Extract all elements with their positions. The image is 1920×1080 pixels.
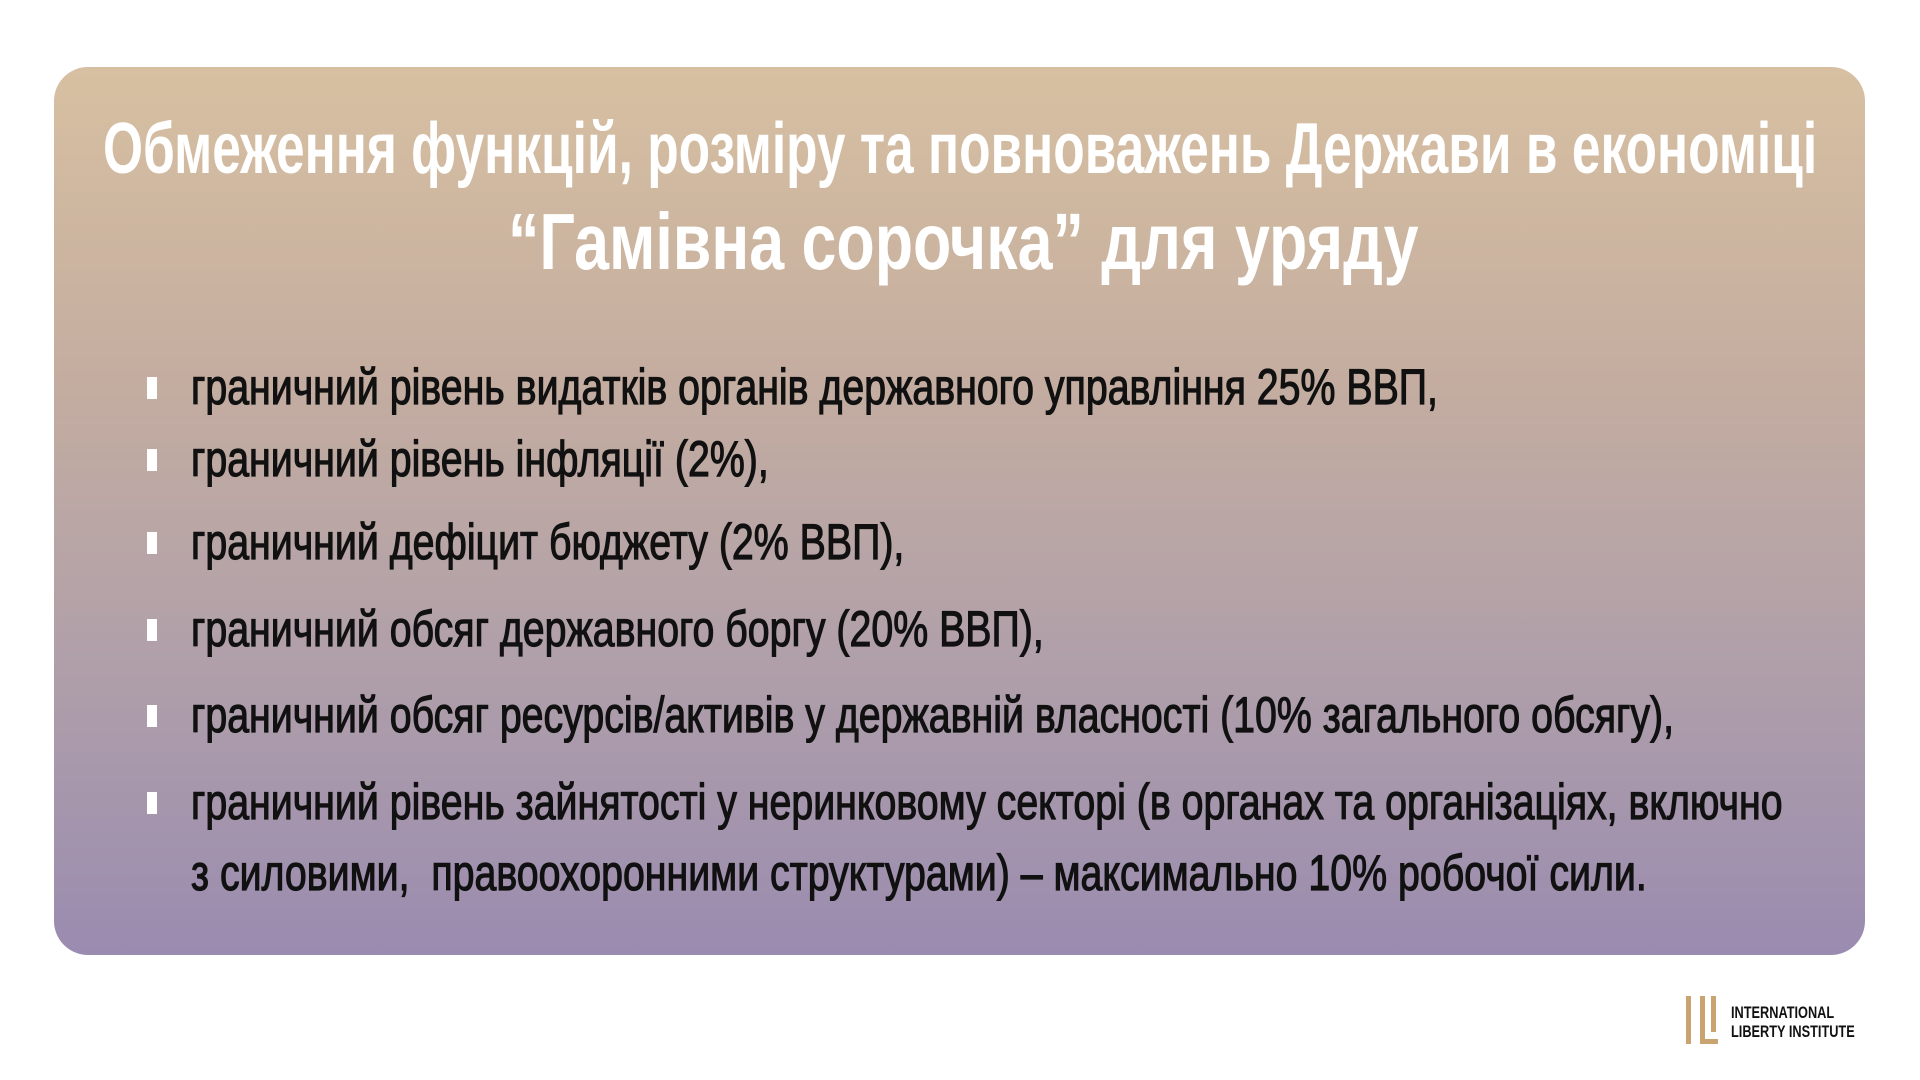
bullet list: з силовими, правоохоронними структурами) – максимально 10% робочої сили. <box>191 845 1647 901</box>
logo: International Liberty Institute <box>1686 996 1855 1044</box>
logo text <box>1731 1003 1855 1041</box>
bullet list: граничний рівень інфляції (2%), <box>191 431 769 487</box>
bullet list <box>147 359 1783 901</box>
bullet list: граничний дефіцит бюджету (2% ВВП), <box>191 514 904 570</box>
bullet 1 <box>147 359 1438 415</box>
logo text: LIBERTY INSTITUTE <box>1731 1022 1855 1041</box>
bullet list: граничний рівень видатків органів державного управління 25% ВВП, <box>191 359 1438 415</box>
bullet 2 <box>147 431 769 487</box>
bullet list: граничний обсяг ресурсів/активів у державній власності (10% загального обсягу), <box>191 687 1674 743</box>
icon: logo bars <box>1686 996 1718 1044</box>
title line 2: “Гамівна сорочка” для уряду <box>508 197 1419 286</box>
logo text: INTERNATIONAL <box>1731 1003 1834 1022</box>
bullet list: граничний обсяг державного боргу (20% ВВП), <box>191 601 1044 657</box>
bullet 3 <box>147 514 904 570</box>
panel: main gradient card <box>54 67 1865 955</box>
bullet list: граничний рівень зайнятості у неринковому секторі (в органах та організаціях, включно <box>191 774 1783 830</box>
bullet 4 <box>147 601 1044 657</box>
title line 1: Обмеження функцій, розміру та повноважень Держави в економіці <box>103 109 1817 189</box>
bullet 6 <box>147 774 1783 901</box>
bullet 5 <box>147 687 1674 743</box>
